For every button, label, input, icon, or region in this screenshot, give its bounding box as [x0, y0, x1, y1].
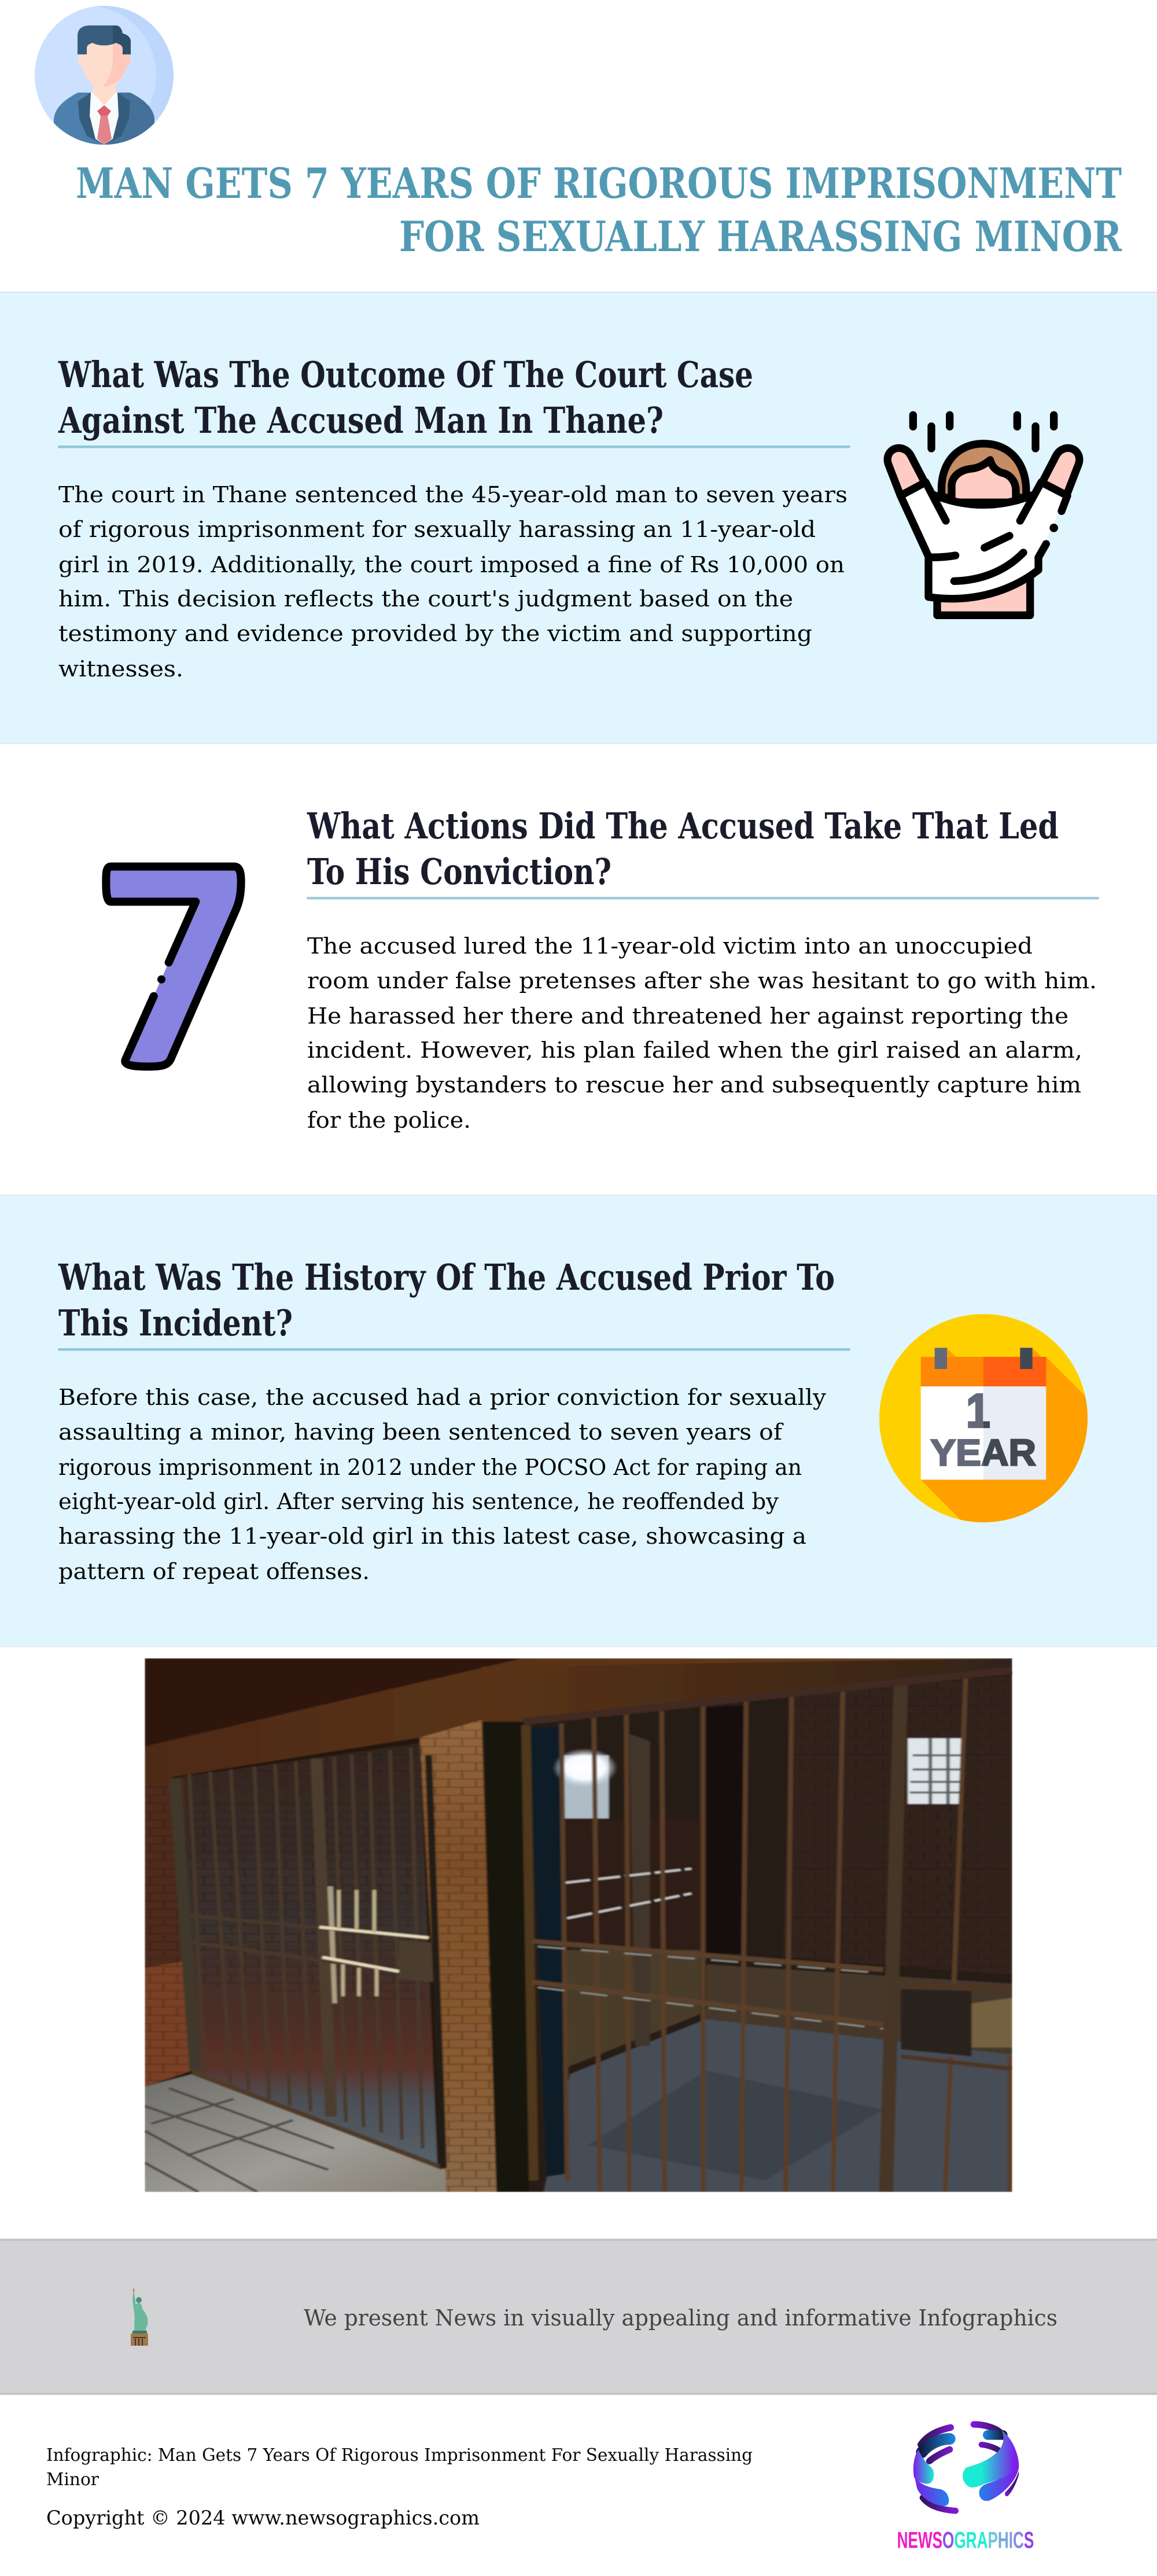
avatar icon: man in suit — [35, 6, 174, 145]
footer: infographic credit: Minor — [46, 2470, 100, 2490]
icon: one year calendar: 1 — [966, 1385, 990, 1438]
text block: history: eight-year-old girl. After serving his sentence, he reoffended by — [58, 1489, 779, 1514]
text block: court case outcome: him. This decision reflects the court's judgment based on the — [58, 586, 793, 612]
text block: court case outcome — [58, 482, 848, 682]
footer: infographic credit: Copyright © 2024 www.newsographics.com — [46, 2507, 480, 2530]
text block: court case outcome: The court in Thane sentenced the 45-year-old man to seven years — [58, 482, 848, 507]
heading: history: What Was The History Of The Accused Prior To — [58, 1256, 835, 1298]
title — [76, 159, 1122, 261]
icon: one year calendar — [879, 1314, 1088, 1522]
footer: infographic credit: Infographic: Man Gets 7 Years Of Rigorous Imprisonment For Sexually Harassing — [46, 2445, 753, 2465]
logo: newsographics — [897, 2424, 1034, 2553]
header panel — [17, 6, 1122, 261]
heading: actions: To His Conviction? — [307, 851, 611, 893]
text block: court case outcome: girl in 2019. Additionally, the court imposed a fine of Rs 10,000 on — [58, 552, 845, 577]
text block: court case outcome: testimony and evidence provided by the victim and supporting — [58, 621, 812, 646]
text block: actions: allowing bystanders to rescue her and subsequently capture him — [307, 1072, 1081, 1098]
text block: actions: incident. However, his plan failed when the girl raised an alarm, — [307, 1037, 1082, 1063]
icon: statue of liberty — [131, 2287, 148, 2346]
text block: court case outcome: of rigorous imprisonment for sexually harassing an 11-year-old — [58, 517, 816, 542]
footer: infographic credit — [46, 2445, 753, 2530]
photo: prison cells with iron bars — [145, 1658, 1012, 2192]
text block: history: harassing the 11-year-old girl in this latest case, showcasing a — [58, 1523, 806, 1549]
text block: actions: He harassed her there and threatened her against reporting the — [307, 1003, 1068, 1029]
text block: history — [58, 1385, 827, 1584]
heading: court case outcome: Against The Accused Man In Thane? — [58, 399, 664, 441]
heading: history — [58, 1256, 835, 1344]
panel: tagline band — [0, 2239, 1157, 2395]
text block: actions: for the police. — [307, 1107, 471, 1133]
text block: history: pattern of repeat offenses. — [58, 1559, 370, 1584]
text block: history: assaulting a minor, having been sentenced to seven years of — [58, 1419, 784, 1445]
text block: court case outcome: witnesses. — [58, 656, 183, 682]
panel: history of the accused — [0, 1195, 1157, 1647]
text block: actions: room under false pretenses after she was hesitant to go with him. — [307, 968, 1097, 993]
heading: history: This Incident? — [58, 1302, 293, 1344]
heading: actions — [307, 805, 1059, 893]
text block: history: Before this case, the accused had a prior conviction for sexually — [58, 1385, 827, 1410]
logo globe mark — [913, 2424, 1019, 2511]
icon: one year calendar: YEAR — [930, 1432, 1036, 1474]
panel: court case outcome — [0, 292, 1157, 744]
panel: actions of the accused — [0, 744, 1157, 1195]
heading: court case outcome — [58, 354, 753, 441]
tagline text: We present News in visually appealing and informative Infographics — [304, 2305, 1057, 2331]
icon: person with raised hands — [887, 415, 1079, 615]
logo wordmark: NEWSOGRAPHICS — [897, 2527, 1034, 2553]
text block: actions — [307, 933, 1097, 1133]
heading: court case outcome: What Was The Outcome Of The Court Case — [58, 354, 753, 396]
text block: actions: The accused lured the 11-year-old victim into an unoccupied — [307, 933, 1033, 959]
text block: history: rigorous imprisonment in 2012 under the POCSO Act for raping an — [58, 1455, 802, 1480]
icon: number seven — [106, 867, 241, 1066]
